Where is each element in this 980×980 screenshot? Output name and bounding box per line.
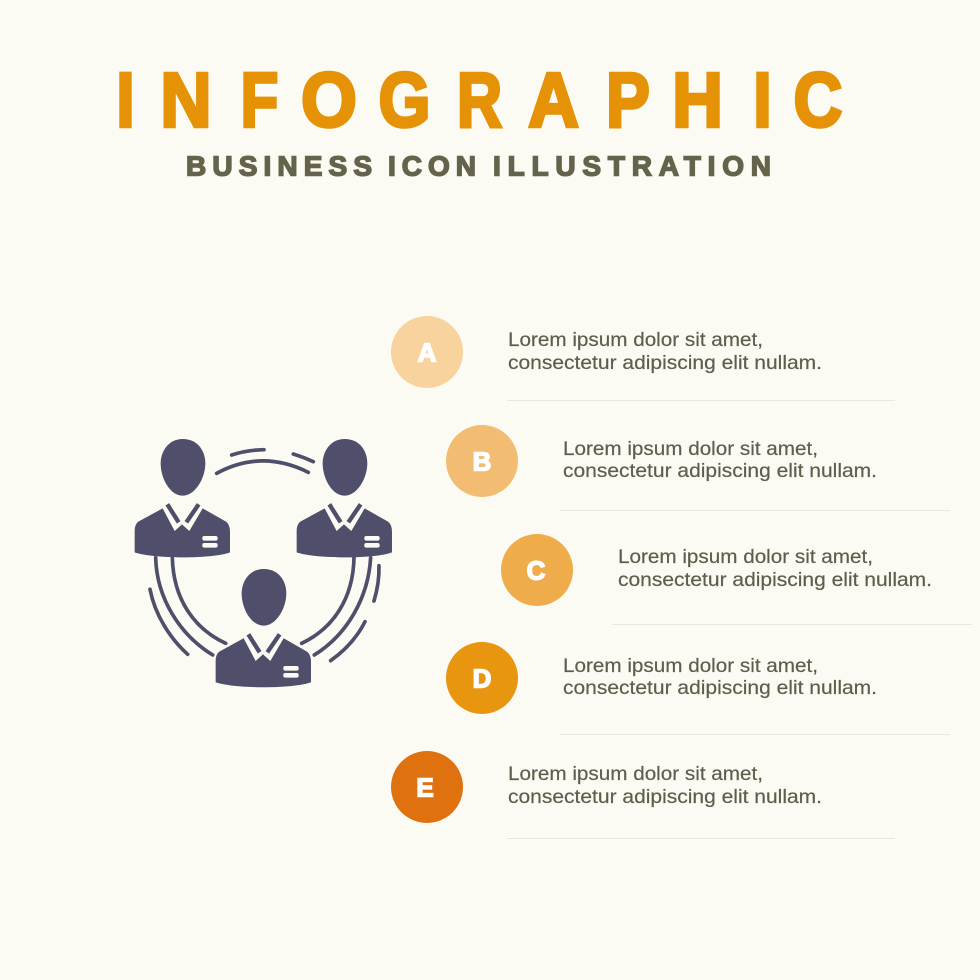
badge A: A [418,338,437,368]
text E: Lorem ipsum dolor sit amet, [508,763,763,785]
text B [563,438,877,482]
step B [446,425,950,511]
subtitle: BUSINESS [186,150,372,182]
step C [501,534,972,625]
icon: team of three people in a circle [135,439,392,687]
connecting arcs [150,450,379,661]
text D [563,655,877,699]
step A [391,316,895,401]
title: F [241,57,278,143]
person: top left [135,439,230,557]
badge D: D [473,664,491,694]
badge E: E [416,772,434,802]
step E [391,751,895,839]
title: P [606,57,650,144]
text A: Lorem ipsum dolor sit amet, [508,329,763,351]
text C [618,546,932,591]
badge A [391,316,463,388]
badge D [446,642,518,714]
badge C [501,534,573,606]
subtitle [186,150,771,182]
title: N [160,57,212,143]
title: R [457,57,502,143]
badge B [446,425,518,497]
title: H [672,56,723,143]
step D [446,642,950,735]
text D: Lorem ipsum dolor sit amet, [563,655,818,677]
badge C: C [527,556,546,586]
title: I [116,57,135,144]
title [116,56,842,144]
text E [508,763,822,808]
badge E [391,751,463,823]
title: G [379,58,430,143]
text B: Lorem ipsum dolor sit amet, [563,438,818,460]
text D: consectetur adipiscing elit nullam. [563,677,877,699]
text C: Lorem ipsum dolor sit amet, [618,546,873,568]
badge B: B [473,446,491,476]
title: A [528,56,579,143]
text E: consectetur adipiscing elit nullam. [508,786,822,808]
title: O [301,57,357,143]
text A [508,329,822,374]
text A: consectetur adipiscing elit nullam. [508,352,822,374]
person: top right [297,439,392,557]
subtitle: ICON [388,150,476,182]
text C: consectetur adipiscing elit nullam. [618,569,932,591]
title: C [794,58,842,143]
text B: consectetur adipiscing elit nullam. [563,460,877,482]
title: I [753,57,772,144]
person: bottom [216,569,311,687]
subtitle: ILLUSTRATION [493,150,771,182]
